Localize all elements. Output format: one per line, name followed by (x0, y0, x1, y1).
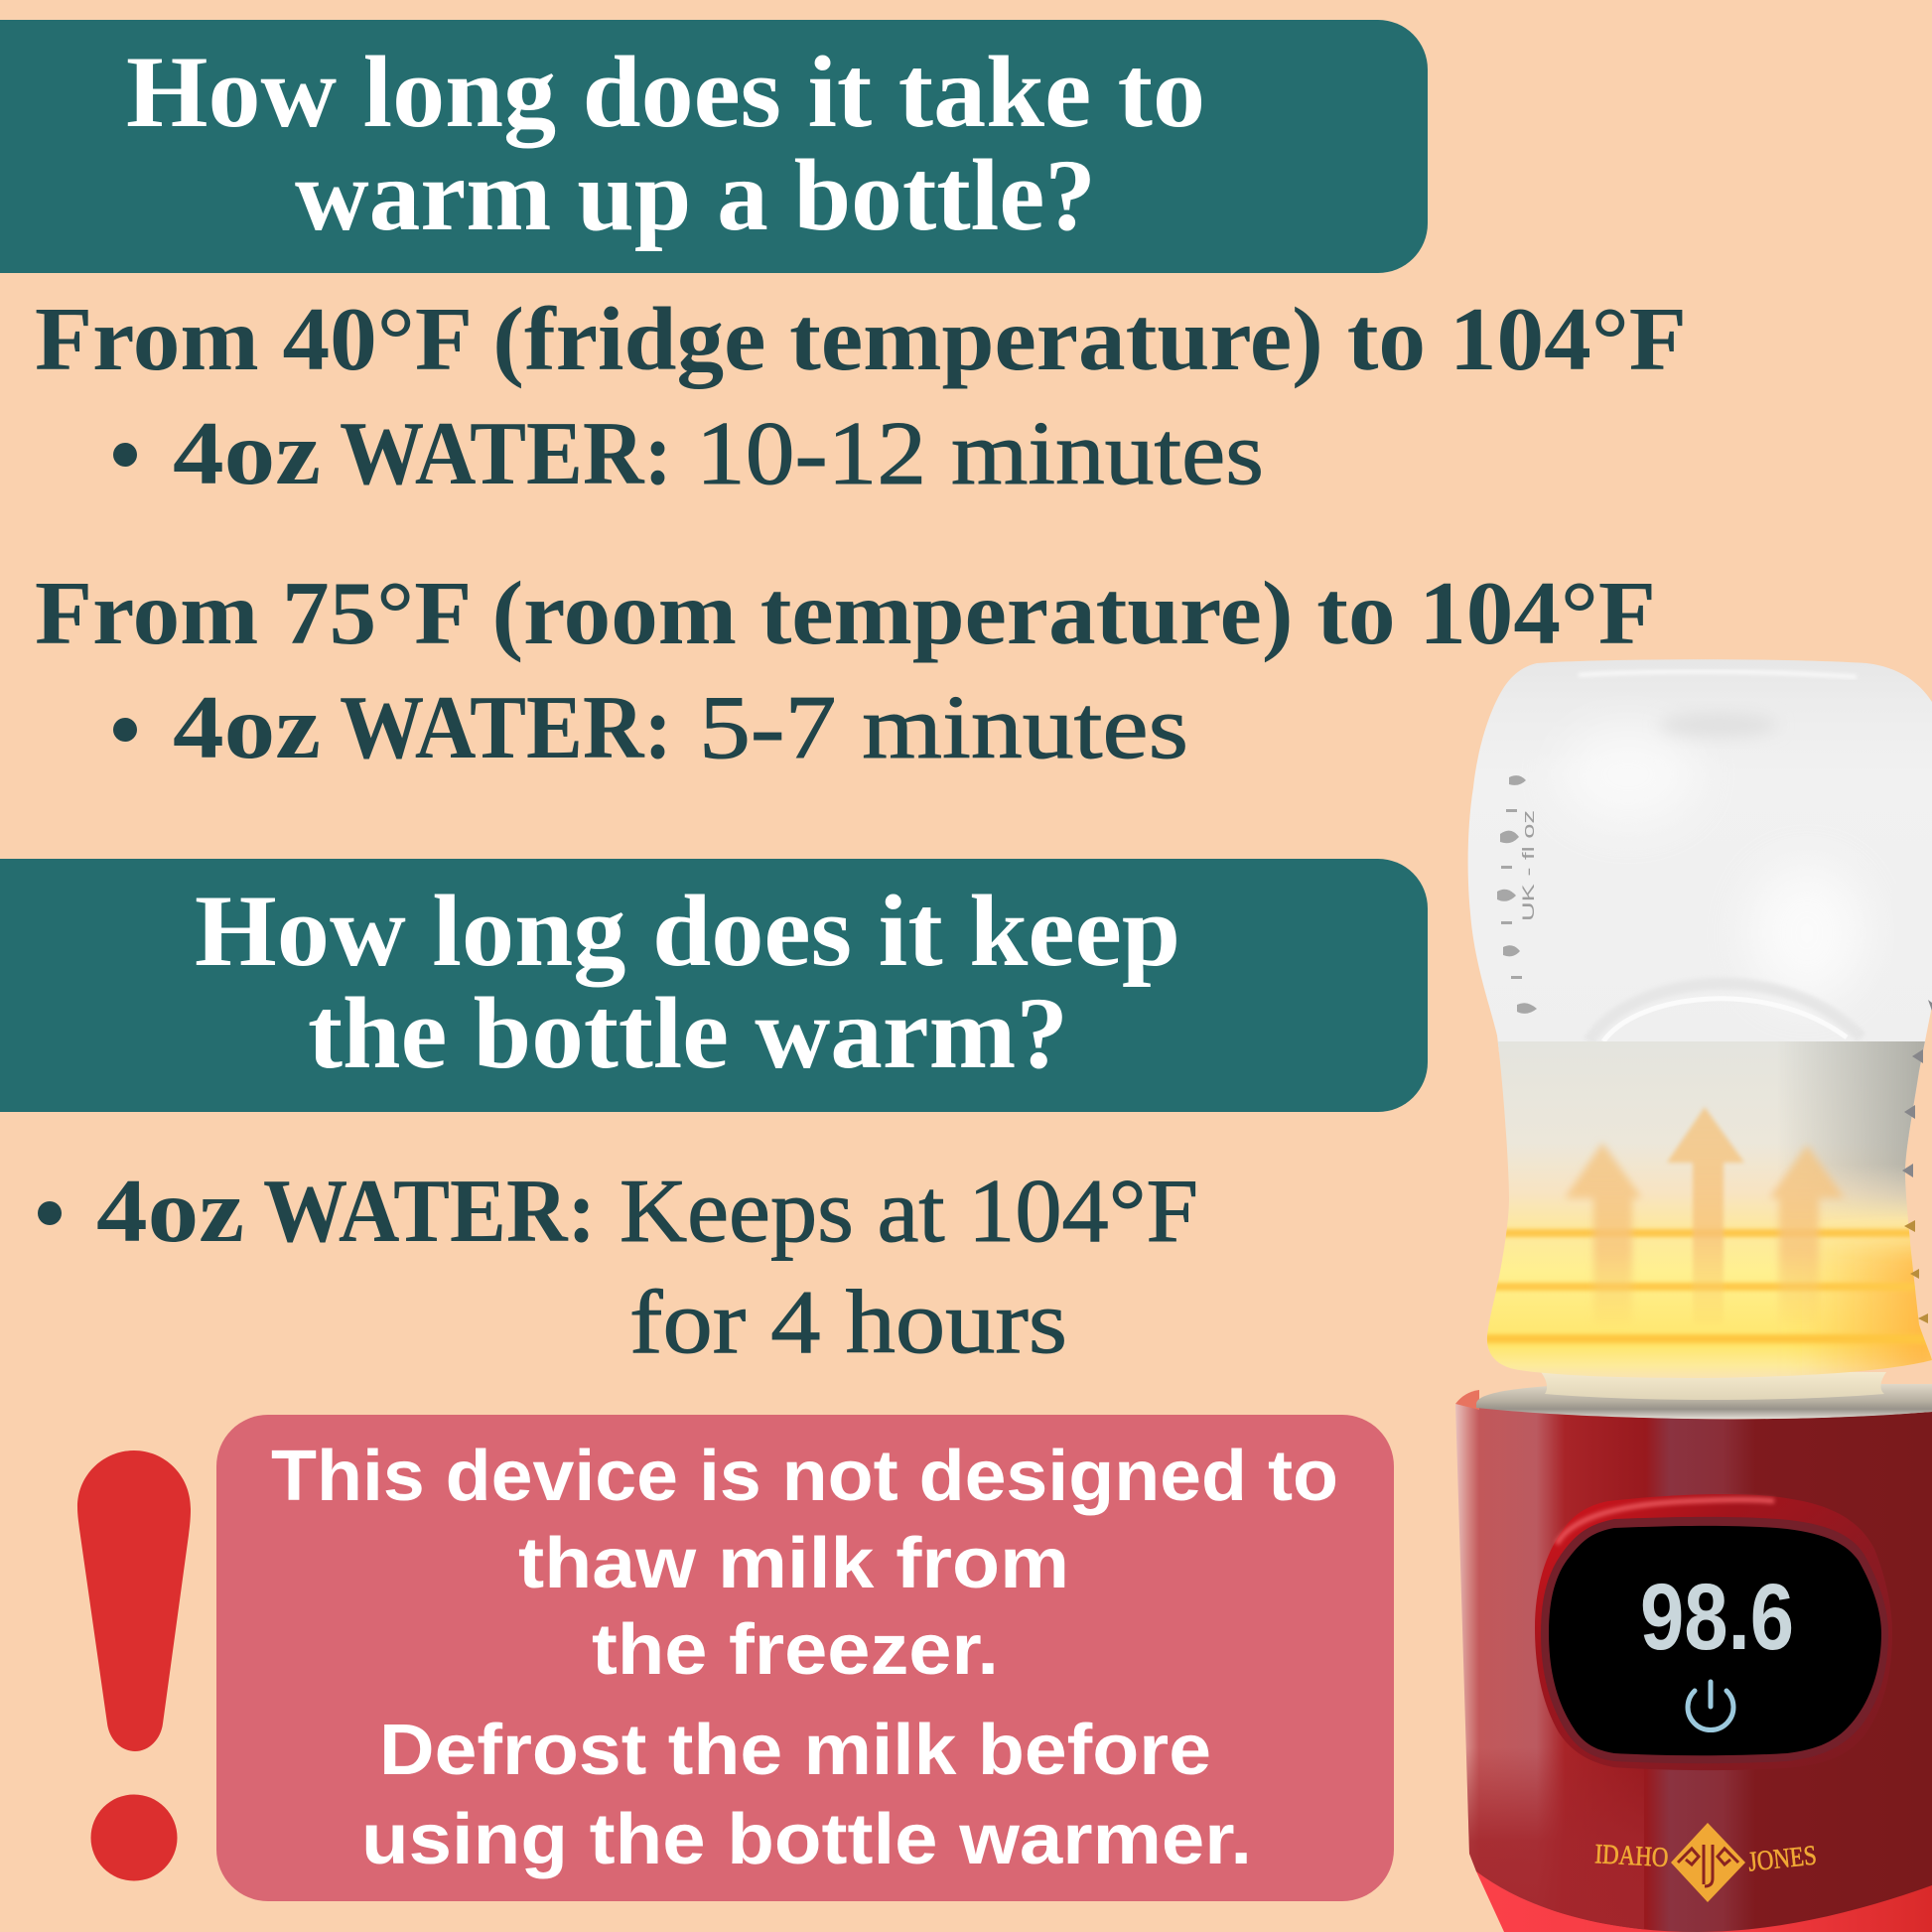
text block: from room temperature: 5-7 minutes (699, 677, 1188, 777)
heading banner: keep warm time: How long does it keep (195, 875, 1180, 988)
heat arrow: left (1565, 1143, 1642, 1324)
callout: freezer warning: thaw milk from (518, 1524, 1069, 1603)
product image: bottle warmer device (1455, 655, 1932, 1932)
heading banner: warm-up time: warm up a bottle? (295, 139, 1096, 252)
text block: from fridge temperature: From 40°F (fridge temperature) to 104°F (35, 289, 1687, 389)
logo: Idaho Jones: IDAHO (1594, 1839, 1669, 1873)
text block: from fridge temperature: 10-12 minutes (696, 403, 1264, 503)
logo: Idaho Jones (1594, 1823, 1818, 1902)
callout: freezer warning: using the bottle warmer. (361, 1800, 1252, 1879)
text block: from fridge temperature (35, 289, 1687, 503)
screen (1549, 1526, 1881, 1755)
screen bezel (1535, 1494, 1892, 1770)
callout: freezer warning (216, 1415, 1394, 1901)
metal ring (1455, 1384, 1932, 1419)
text block: from room temperature: From 75°F (room temperature) to 104°F (35, 563, 1656, 663)
text block: keep warm duration (38, 1161, 1198, 1372)
text block: keep warm duration: for 4 hours (629, 1272, 1067, 1372)
heat arrow: centre (1667, 1107, 1744, 1324)
callout: freezer warning: the freezer. (592, 1610, 999, 1690)
bottle scale marks: left (1497, 775, 1537, 1014)
bottle neck (1541, 1372, 1886, 1400)
bottle (1459, 655, 1932, 1385)
bottle inner dome (1588, 984, 1862, 1041)
text block: from room temperature: WATER: (340, 677, 672, 777)
heading banner: warm-up time (0, 20, 1428, 273)
heat arrow: right (1769, 1145, 1845, 1324)
heading banner: keep warm time: the bottle warm? (308, 977, 1068, 1090)
text block: from fridge temperature: 4oz (173, 403, 321, 503)
text block: keep warm duration: 4oz (96, 1161, 244, 1261)
temperature reading: 98.6 (1640, 1565, 1794, 1670)
text block: from fridge temperature: WATER: (340, 403, 672, 503)
bottle scale label: UK - fl oz (1519, 810, 1538, 921)
bottle scale marks: right (1902, 1000, 1932, 1323)
icon: power button (1688, 1682, 1733, 1730)
heading banner: keep warm time (0, 859, 1428, 1112)
base of warmer (1476, 1871, 1932, 1932)
bottle highlights (1559, 671, 1866, 1003)
warmer body (1455, 1400, 1932, 1932)
text block: from room temperature (35, 563, 1656, 777)
text block: keep warm duration: Keeps at 104°F (620, 1161, 1198, 1261)
icon: exclamation mark (77, 1450, 191, 1880)
callout: freezer warning: Defrost the milk before (379, 1711, 1211, 1790)
logo: Idaho Jones: JONES (1746, 1840, 1818, 1877)
warming sleeve (1459, 1041, 1932, 1379)
callout: freezer warning: This device is not designed to (271, 1437, 1338, 1516)
text block: keep warm duration: WATER: (263, 1161, 596, 1261)
heat stripes (1459, 1229, 1932, 1343)
text block: from room temperature: 4oz (173, 677, 321, 777)
heading banner: warm-up time: How long does it take to (126, 36, 1205, 149)
